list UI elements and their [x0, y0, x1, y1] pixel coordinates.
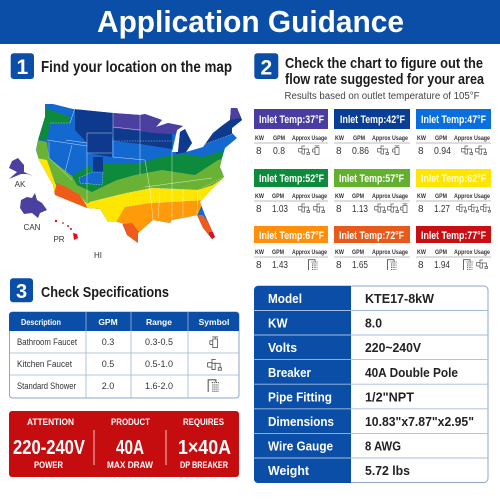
- card: 72F: KW: [335, 249, 345, 256]
- product spec table: Wire Gauge: [268, 439, 333, 454]
- usage table: 0.3: [102, 337, 114, 347]
- card: 47F: Approx Usage: [454, 135, 490, 142]
- power requirements panel: 220-240V: [13, 437, 86, 459]
- card: 72F: [334, 226, 410, 271]
- card: 67F: Approx Usage: [292, 249, 327, 256]
- section 3 heading: Check Specifications: [41, 284, 169, 301]
- card: 67F: Inlet Temp:67°F: [259, 230, 324, 242]
- card: 57F: Inlet Temp:57°F: [339, 173, 404, 185]
- card: 72F: Inlet Temp:72°F: [339, 230, 404, 242]
- section 2 heading: [254, 53, 485, 88]
- card: 62F: [416, 169, 491, 215]
- usage table: 0.3-0.5: [145, 337, 173, 347]
- card: 62F: Inlet Temp:62°F: [421, 173, 486, 185]
- card: 77F: 8: [418, 260, 424, 271]
- card: 37F: GPM: [273, 135, 285, 142]
- card: 42F: Approx Usage: [372, 135, 408, 142]
- card: 52F: 8: [256, 204, 262, 215]
- usage table: Symbol: [199, 317, 229, 327]
- card: 57F: Approx Usage: [372, 193, 408, 200]
- card: 72F: 1.65: [352, 260, 368, 271]
- power requirements panel: ATTENTION: [27, 417, 74, 427]
- section 1 heading: 1: [16, 56, 28, 79]
- card: 52F: KW: [255, 193, 265, 200]
- product spec table: 8 AWG: [365, 440, 401, 454]
- card: 62F: GPM: [435, 193, 447, 200]
- product spec table: 40A Double Pole: [365, 366, 458, 380]
- usage table: Range: [146, 317, 172, 327]
- usage table: 2.0: [102, 381, 114, 391]
- section 2 heading: 2: [260, 56, 272, 80]
- card: 47F: KW: [417, 135, 427, 142]
- usage table: Standard Shower: [17, 381, 76, 391]
- card: 42F: KW: [335, 135, 345, 142]
- card: 67F: 8: [256, 260, 262, 271]
- product spec table: 220~240V: [365, 341, 422, 355]
- usage table: Bathroom Faucet: [17, 337, 77, 347]
- inset: Alaska: [9, 158, 33, 179]
- power requirements panel: [9, 411, 239, 477]
- card: 52F: GPM: [272, 193, 284, 200]
- product spec table: KW: [268, 316, 288, 331]
- US climate map: CAN: [24, 223, 41, 232]
- card: 67F: KW: [255, 249, 265, 256]
- card: 62F: Approx Usage: [454, 193, 490, 200]
- card: 62F: KW: [417, 193, 427, 200]
- card: 72F: Approx Usage: [372, 249, 408, 256]
- US climate map: PR: [53, 235, 65, 244]
- US climate map: HI: [94, 251, 102, 260]
- US climate map: [9, 100, 250, 260]
- power requirements panel: DP BREAKER: [180, 460, 228, 470]
- power requirements panel: 1×40A: [178, 437, 231, 459]
- card: 67F: [254, 226, 328, 271]
- card: 47F: Inlet Temp:47°F: [421, 114, 486, 126]
- card: 77F: Approx Usage: [454, 249, 490, 256]
- product spec table: 1/2"NPT: [365, 390, 414, 404]
- card: 47F: 8: [418, 146, 424, 157]
- card: 47F: [416, 109, 491, 157]
- card: 37F: Approx Usage: [292, 135, 327, 142]
- usage table: 0.5: [102, 359, 114, 369]
- product spec table: KTE17-8kW: [365, 292, 434, 306]
- card: 77F: [416, 226, 491, 271]
- product spec table: 8.0: [365, 317, 382, 331]
- section 1 heading: Find your location on the map: [41, 59, 232, 76]
- card: 57F: 8: [336, 204, 342, 215]
- power requirements panel: POWER: [34, 460, 63, 470]
- card: 62F: 1.27: [434, 204, 450, 215]
- card: 52F: 1.03: [272, 204, 288, 215]
- section 3 heading: [10, 278, 169, 303]
- card: 42F: GPM: [353, 135, 365, 142]
- card: 77F: 1.94: [434, 260, 450, 271]
- card: 37F: KW: [255, 135, 265, 142]
- product spec table: Pipe Fitting: [268, 390, 332, 404]
- card: 37F: 8: [256, 146, 262, 157]
- power requirements panel: MAX DRAW: [107, 460, 153, 470]
- product spec table: Volts: [268, 340, 297, 355]
- card: 77F: GPM: [435, 249, 447, 256]
- card: 52F: [254, 169, 328, 215]
- section 3 heading: 3: [16, 281, 27, 303]
- usage table: Description: [21, 317, 61, 327]
- card: 37F: 0.8: [273, 146, 285, 157]
- card: 72F: GPM: [352, 249, 364, 256]
- product spec table: 10.83"x7.87"x2.95": [365, 415, 474, 429]
- product spec table: Dimensions: [268, 414, 334, 429]
- inset: Canada: [20, 193, 47, 218]
- card: 52F: Inlet Temp:52°F: [259, 173, 324, 185]
- usage table: Kitchen Faucet: [17, 359, 72, 369]
- card: 42F: 0.86: [352, 146, 369, 157]
- US climate map: AK: [15, 180, 26, 189]
- card: 67F: 1.43: [272, 260, 288, 271]
- card: 47F: 0.94: [434, 146, 451, 157]
- usage table: 1.6-2.0: [145, 381, 173, 391]
- usage table: GPM: [98, 317, 118, 327]
- card: 47F: GPM: [435, 135, 447, 142]
- product spec table: Model: [268, 291, 302, 306]
- card: 42F: Inlet Temp:42°F: [340, 114, 405, 126]
- card: 67F: GPM: [272, 249, 284, 256]
- card: 37F: [254, 109, 328, 157]
- power requirements panel: PRODUCT: [111, 417, 150, 427]
- card: 72F: 8: [336, 260, 342, 271]
- card: 57F: GPM: [352, 193, 364, 200]
- header banner: [0, 0, 500, 44]
- section 1 heading: [11, 53, 232, 79]
- card: 42F: [334, 109, 410, 157]
- card: 37F: Inlet Temp:37°F: [259, 114, 324, 126]
- card: 52F: Approx Usage: [292, 193, 327, 200]
- card: 77F: Inlet Temp:77°F: [421, 230, 486, 242]
- power requirements panel: REQUIRES: [183, 417, 224, 427]
- power requirements panel: 40A: [116, 437, 144, 459]
- title: Application Guidance: [97, 4, 404, 39]
- card: 57F: KW: [335, 193, 345, 200]
- product spec table: 5.72 lbs: [365, 464, 410, 478]
- card: 57F: [334, 169, 410, 215]
- usage table: [9, 312, 239, 398]
- card: 62F: 8: [418, 204, 424, 215]
- subtitle: Results based on outlet temperature of 105°F: [284, 91, 480, 102]
- product spec table: Weight: [268, 463, 310, 478]
- card: 42F: 8: [336, 146, 342, 157]
- usage table: 0.5-1.0: [145, 359, 173, 369]
- inset: Hawaii: [55, 220, 78, 240]
- card: 77F: KW: [417, 249, 427, 256]
- card: 57F: 1.13: [352, 204, 368, 215]
- product spec table: [254, 286, 488, 483]
- product spec table: Breaker: [268, 365, 311, 380]
